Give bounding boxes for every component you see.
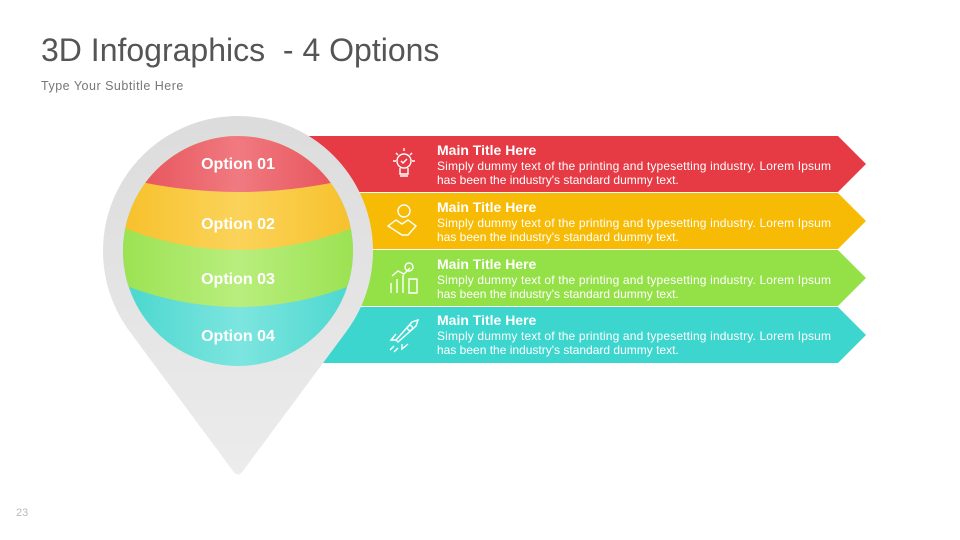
arrow 2: Simply dummy text of the printing and typesetting industry. Lorem Ipsum — [437, 216, 831, 230]
text 1: Main Title Here — [437, 142, 537, 158]
arrow 4: Simply dummy text of the printing and typesetting industry. Lorem Ipsum — [437, 329, 831, 343]
arrow 3: has been the industry's standard dummy text. — [437, 287, 679, 301]
arrow 1: has been the industry's standard dummy text. — [437, 173, 679, 187]
option labels: Option 04 — [201, 328, 275, 345]
option labels — [201, 156, 275, 345]
arrow 2 — [300, 193, 866, 249]
sphere bands — [123, 136, 353, 366]
option labels: Option 03 — [201, 271, 275, 288]
icon: lightbulb — [393, 148, 415, 176]
option labels: Option 02 — [201, 216, 275, 233]
arrow 3 — [300, 250, 866, 306]
text 3: Main Title Here — [437, 256, 537, 272]
arrow 1: Simply dummy text of the printing and typesetting industry. Lorem Ipsum — [437, 159, 831, 173]
arrow 3: Simply dummy text of the printing and typesetting industry. Lorem Ipsum — [437, 273, 831, 287]
arrow 2: has been the industry's standard dummy text. — [437, 230, 679, 244]
title: 3D Infographics - 4 Options — [41, 32, 439, 68]
text 2: Main Title Here — [437, 199, 537, 215]
pin — [103, 116, 373, 474]
arrow 4: has been the industry's standard dummy text. — [437, 343, 679, 357]
option labels: Option 01 — [201, 156, 275, 173]
icon: rocket — [390, 320, 418, 352]
subtitle: Type Your Subtitle Here — [41, 79, 184, 93]
icon: growth chart — [391, 263, 417, 293]
arrow 4 — [300, 307, 866, 363]
page number: 23 — [16, 507, 28, 519]
arrow 1 — [300, 136, 866, 192]
text 4: Main Title Here — [437, 312, 537, 328]
icon: handshake — [388, 205, 416, 235]
infographic — [103, 116, 866, 474]
